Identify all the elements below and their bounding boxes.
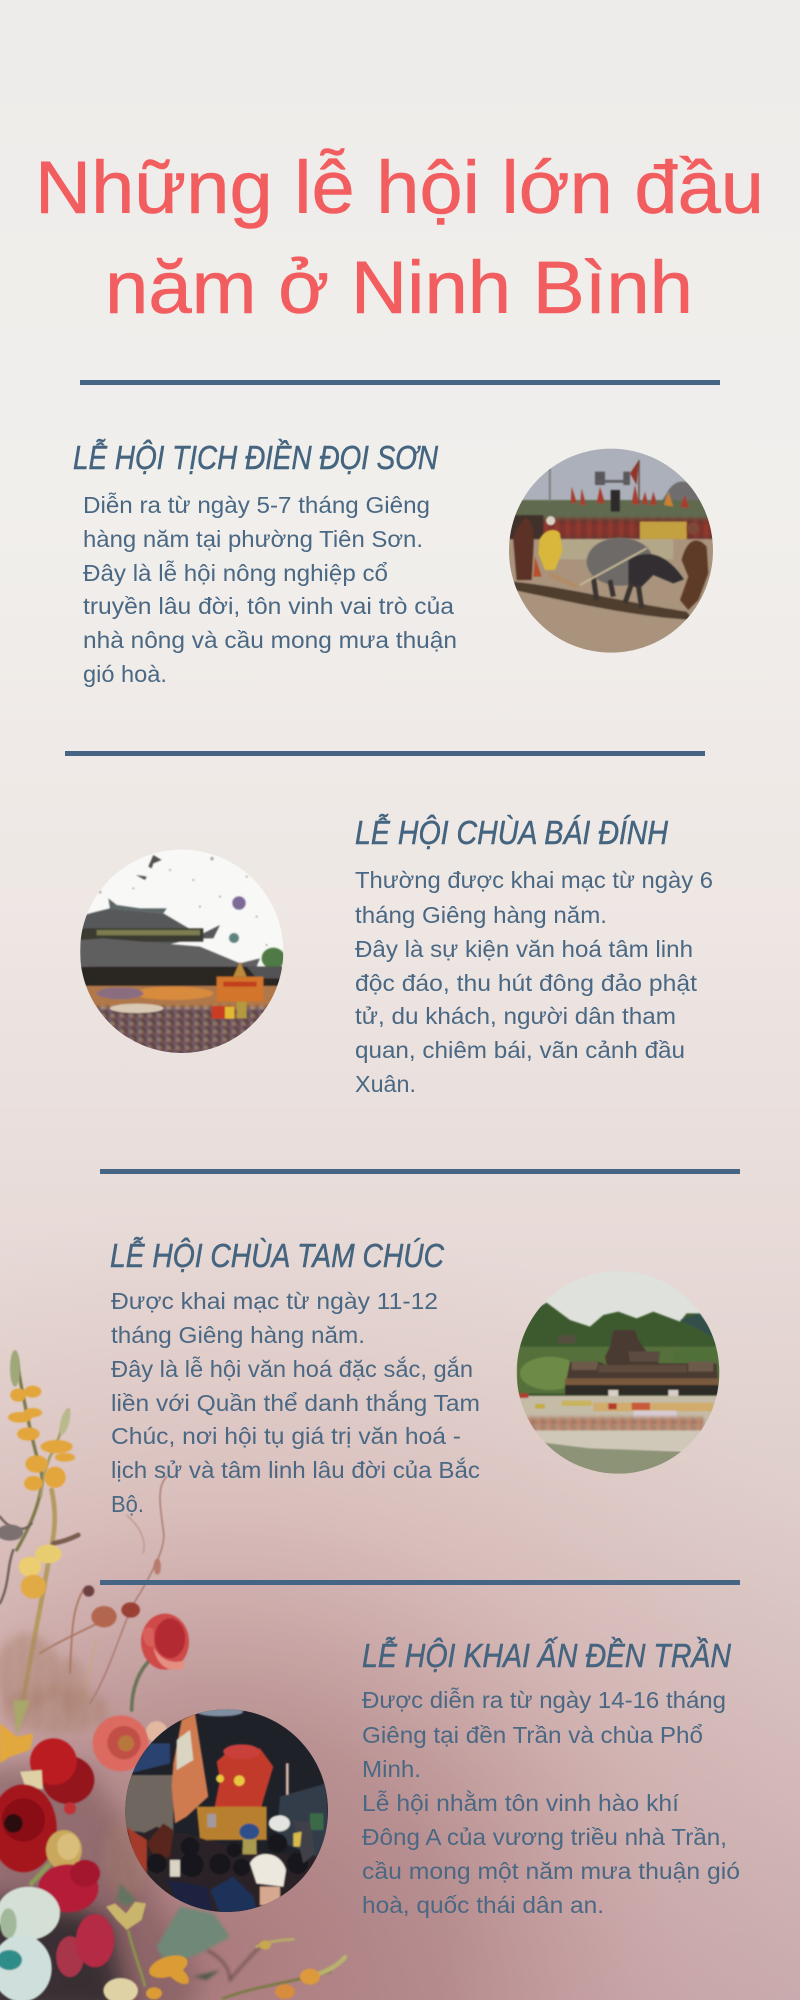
body text: liền với Quần thể danh thắng Tam: [111, 1390, 480, 1416]
dried flower mass: [0, 1633, 85, 1717]
cream tulip: [46, 1830, 82, 1870]
body text: Lễ hội nhằm tôn vinh hào khí: [362, 1790, 680, 1816]
coral poppy: [93, 1715, 149, 1771]
body text: Đây là lễ hội văn hoá đặc sắc, gắn: [111, 1356, 473, 1382]
body text: gió hoà.: [83, 661, 167, 687]
divider 3: [100, 1169, 740, 1174]
rust dried flowers: [91, 1606, 117, 1627]
body text: lịch sử và tâm linh lâu đời của Bắc: [111, 1457, 480, 1483]
right sprig: [223, 1939, 345, 1998]
title: Những lễ hội lớn đầu: [35, 146, 764, 229]
photo: Khai Ấn procession: [123, 1707, 330, 1917]
heading: LỄ HỘI TỊCH ĐIỀN ĐỌI SƠN: [73, 439, 438, 476]
photo: Tam Chúc pagoda: [516, 1271, 720, 1474]
orange blossoms: [146, 1951, 192, 1999]
yellow flower: [0, 1723, 33, 1763]
body text: tháng Giêng hàng năm.: [355, 902, 607, 928]
divider 1: [80, 380, 720, 385]
ploughman figures: [513, 517, 534, 580]
panel: Lễ hội Tịch Điền Đọi Sơn: [74, 438, 713, 687]
body text: hàng năm tại phường Tiên Sơn.: [83, 526, 423, 552]
body text: nhà nông và cầu mong mưa thuận: [83, 627, 457, 653]
red rose: [141, 1614, 189, 1670]
photo: Bái Đính pagoda crowd: [80, 850, 284, 1053]
floral decoration: lower bouquet: [0, 1687, 345, 2000]
body text: Thường được khai mạc từ ngày 6: [355, 867, 713, 893]
white flowers: [0, 1887, 60, 1940]
buffalo: [587, 538, 653, 586]
body text: Minh.: [362, 1756, 421, 1782]
title: [35, 146, 764, 329]
body text: Chúc, nơi hội tụ giá trị văn hoá -: [111, 1423, 461, 1449]
crimson flower lower: [56, 1936, 84, 1977]
red flowers: [42, 1756, 94, 1804]
floral decoration: upper stems and sprigs: [0, 1350, 189, 1717]
body text: Đây là lễ hội nông nghiệp cổ: [83, 560, 388, 586]
body text: [111, 1288, 480, 1517]
body text: Diễn ra từ ngày 5-7 tháng Giêng: [83, 492, 430, 518]
body text: Xuân.: [355, 1071, 416, 1097]
body text: tử, du khách, người dân tham: [355, 1003, 676, 1029]
body text: quan, chiêm bái, vãn cảnh đầu: [355, 1037, 685, 1063]
body text: [362, 1687, 740, 1918]
crimson flower: [38, 1864, 98, 1912]
body text: Bộ.: [111, 1491, 144, 1517]
panel: Lễ hội chùa Bái Đính: [60, 814, 713, 1097]
cream bud and greenery: [106, 1902, 146, 1930]
body text: Được khai mạc từ ngày 11-12: [111, 1288, 438, 1314]
body text: [355, 867, 713, 1097]
heading: LỄ HỘI CHÙA TAM CHÚC: [110, 1237, 445, 1274]
divider 2: [65, 751, 705, 756]
divider 4: [100, 1580, 740, 1585]
panel: Lễ hội chùa Tam Chúc: [110, 1237, 750, 1517]
photo: ploughing with buffalo: [509, 448, 713, 653]
body text: truyền lâu đời, tôn vinh vai trò của: [83, 593, 454, 619]
body text: hoà, quốc thái dân an.: [362, 1892, 604, 1918]
body text: [83, 492, 457, 687]
body text: tháng Giêng hàng năm.: [111, 1322, 365, 1348]
body text: Được diễn ra từ ngày 14-16 tháng: [362, 1687, 726, 1713]
right handler: [680, 540, 708, 610]
body text: cầu mong một năm mưa thuận gió: [362, 1858, 740, 1884]
title: năm ở Ninh Bình: [105, 246, 693, 329]
panel: Lễ hội Khai Ấn đền Trần: [123, 1637, 740, 1918]
body text: Đông A của vương triều nhà Trần,: [362, 1824, 727, 1850]
body text: độc đáo, thu hút đông đảo phật: [355, 970, 698, 996]
heading: LỄ HỘI CHÙA BÁI ĐÍNH: [355, 814, 668, 851]
body text: Đây là sự kiện văn hoá tâm linh: [355, 936, 693, 962]
orange blossoms on the left stalk: [8, 1350, 75, 1599]
body text: Giêng tại đền Trần và chùa Phổ: [362, 1722, 703, 1748]
heading: LỄ HỘI KHAI ẤN ĐỀN TRẦN: [362, 1637, 731, 1674]
